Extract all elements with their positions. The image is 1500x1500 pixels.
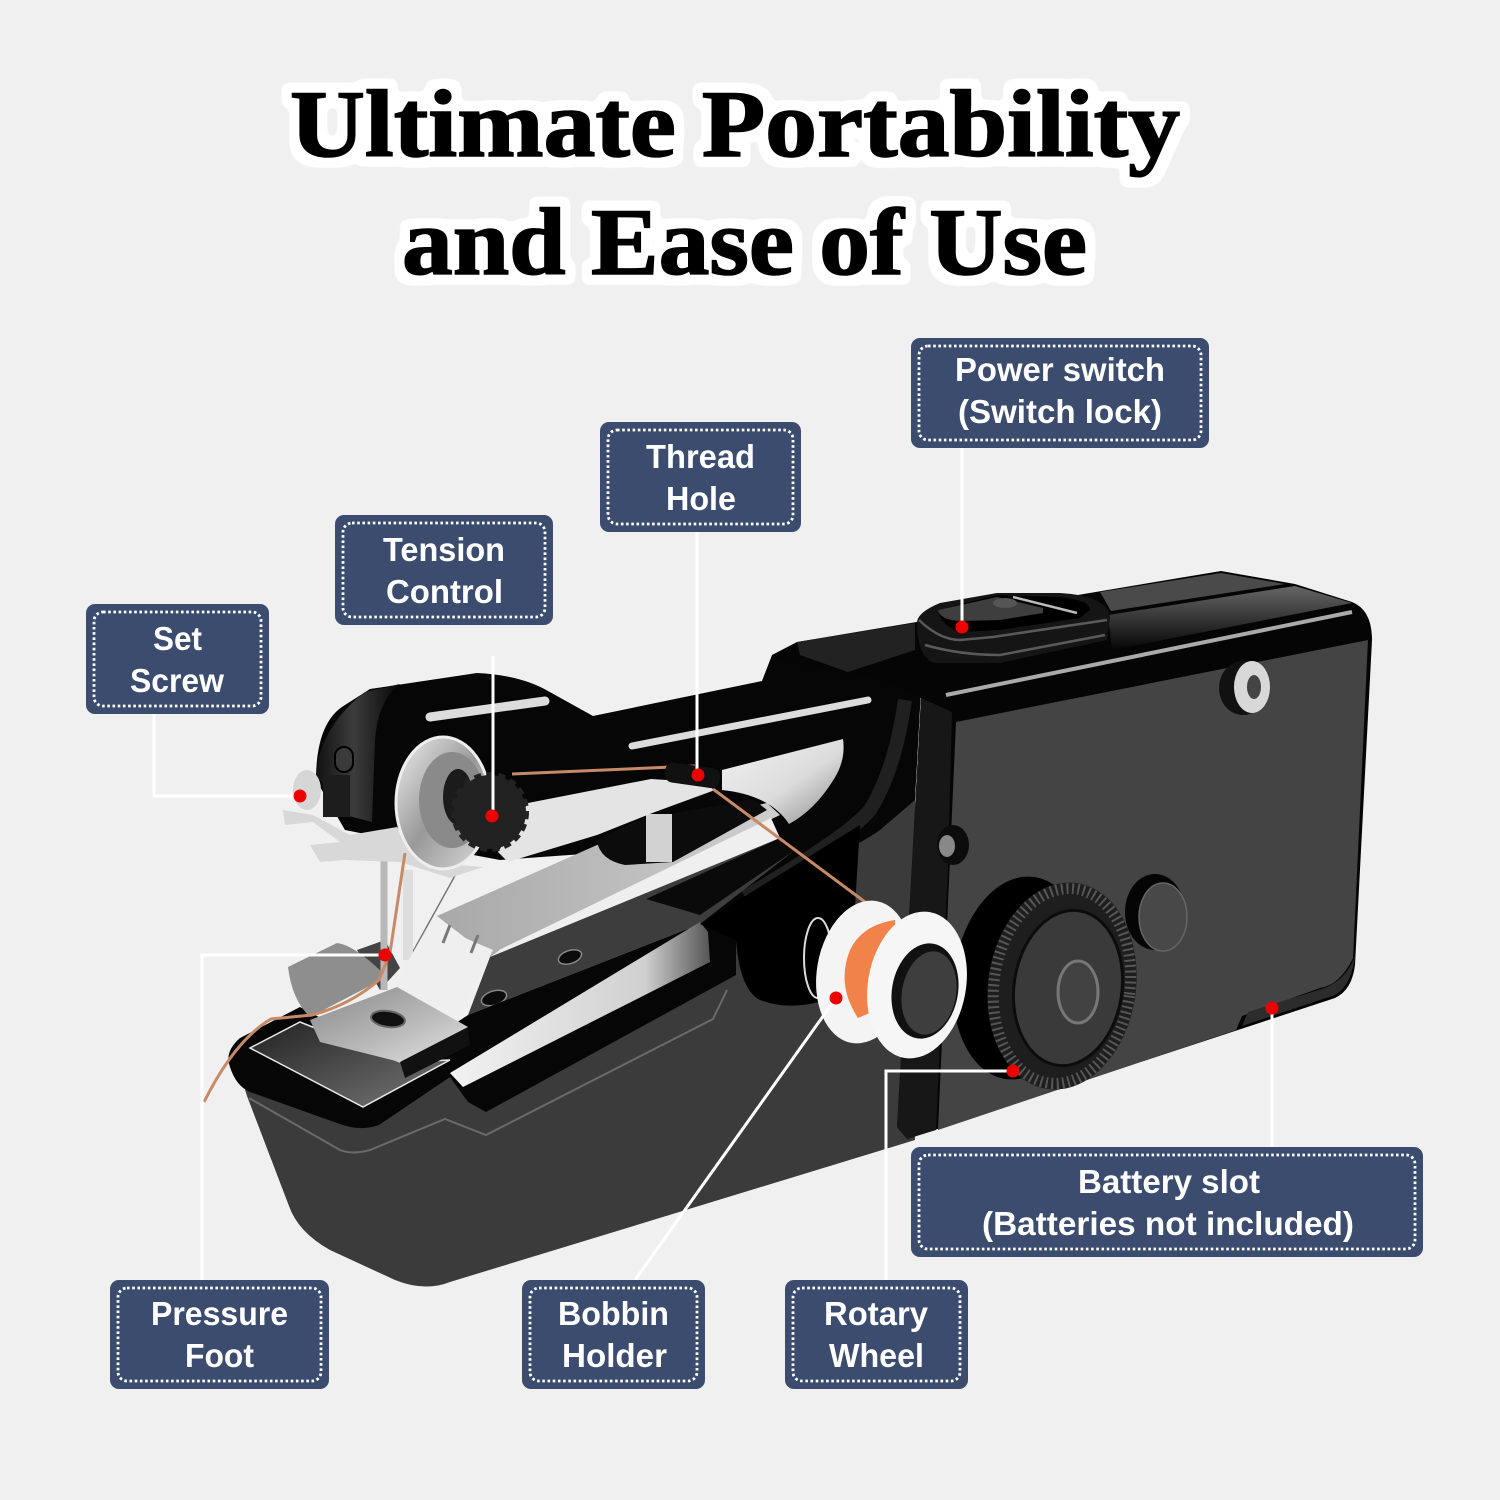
head slot: [335, 747, 353, 772]
lid highlight: [946, 612, 1352, 695]
label: battery slot: (Batteries not included): [982, 1205, 1354, 1242]
machine arm: [316, 642, 921, 924]
body contour line: [249, 990, 727, 1152]
bright rail: [499, 818, 780, 962]
marker: rotary wheel: [1006, 1064, 1020, 1078]
marker: thread hole: [692, 768, 704, 782]
title: [290, 71, 1180, 295]
mount rivets: [479, 947, 583, 1009]
bobbin: [804, 893, 978, 1066]
presser foot slot: [370, 1009, 406, 1029]
leader line: rotary wheel: [886, 1071, 1013, 1280]
label: pressure foot: Pressure: [151, 1295, 288, 1332]
mount plate dark fold: [646, 838, 795, 915]
adjust knob: [1125, 874, 1187, 951]
shoulder curve: [745, 700, 905, 897]
left lid panel: [797, 623, 915, 672]
switch recess: [938, 595, 1090, 632]
presser foot plate: [310, 987, 468, 1062]
bracket screws: [443, 925, 478, 953]
thread: [204, 766, 892, 1102]
leader line: pressure foot: [202, 955, 385, 1280]
dark block behind foot: [357, 940, 400, 990]
rotary wheel: [940, 868, 1150, 1099]
marker: power switch: [956, 620, 968, 634]
white bracket: [393, 923, 493, 1015]
label: battery slot: Battery slot: [1078, 1163, 1260, 1200]
upper silver lever: [498, 779, 715, 862]
label: pressure foot: Foot: [185, 1337, 254, 1374]
label: power switch: (Switch lock): [958, 393, 1162, 430]
black recess: [700, 825, 860, 1006]
title: and Ease of Use: [402, 189, 1087, 295]
perforated mount plate: [468, 838, 795, 1015]
leader line: tension control: [492, 656, 494, 815]
tension disc: [396, 737, 490, 869]
product illustration: handheld sewing machine: [204, 571, 1372, 1287]
power switch: [917, 593, 1110, 663]
head side shading: [316, 684, 400, 822]
marker: set screw: [294, 790, 306, 802]
needle guide: [403, 870, 413, 960]
thread hole guide: [664, 762, 721, 789]
label: power switch: Power switch: [955, 351, 1165, 388]
machine lower body: [236, 790, 915, 1287]
battery box: [772, 571, 1372, 1139]
top right screw: [1219, 661, 1270, 715]
leader line: battery slot: [1270, 1008, 1274, 1147]
label: power switch: [911, 338, 1209, 448]
label: pressure foot: [110, 1280, 329, 1389]
silver needle plate: [437, 803, 780, 957]
leader line: power switch: [960, 448, 964, 627]
title: Ultimate Portability: [290, 71, 1180, 177]
label: rotary wheel: Rotary: [824, 1295, 929, 1332]
lever slot: [597, 799, 767, 865]
label: rotary wheel: Wheel: [829, 1337, 924, 1374]
base plate: [250, 1022, 450, 1107]
switch sliver: [1013, 597, 1077, 613]
label: thread hole: Hole: [666, 480, 736, 517]
set screw: [293, 770, 350, 817]
label: bobbin holder: Holder: [562, 1337, 667, 1374]
wire behind needle: [410, 872, 457, 957]
label: set screw: Set: [153, 620, 202, 657]
label: tension control: Tension: [383, 531, 505, 568]
switch base: [917, 593, 1110, 663]
label: thread hole: [600, 422, 801, 532]
front face: [938, 640, 1368, 1130]
tension spring: [443, 769, 473, 825]
label: tension control: Control: [386, 573, 503, 610]
label: set screw: Screw: [130, 662, 224, 699]
presser foot toe: [288, 943, 387, 1017]
lower silver rail: [450, 922, 710, 1087]
label: set screw: [86, 604, 269, 714]
label: thread hole: Thread: [646, 438, 755, 475]
tension disc inner: [419, 752, 485, 848]
marker: tension control: [486, 810, 498, 822]
side screw: [937, 825, 969, 865]
lid top panel: [1100, 573, 1285, 611]
crescent silver plate: [722, 739, 844, 824]
presser foot shadow: [400, 1027, 470, 1078]
chassis lip: [228, 924, 736, 1128]
label: battery slot: [911, 1147, 1423, 1257]
battery slot: [1242, 955, 1355, 1026]
leader line: set screw: [154, 714, 300, 796]
switch rim: [919, 620, 1107, 655]
leader line: bobbin holder: [635, 998, 836, 1280]
label: bobbin holder: [522, 1280, 705, 1389]
leader line: thread hole: [696, 532, 698, 775]
arm highlight strips: [430, 700, 868, 746]
marker: battery slot: [1266, 1002, 1278, 1014]
left edge of box: [897, 698, 952, 1139]
central post: [646, 814, 672, 862]
switch button: [938, 597, 1043, 621]
lid second panel: [1108, 586, 1352, 650]
label: tension control: [335, 515, 553, 625]
switch nub: [993, 598, 1017, 608]
tension knob: [454, 775, 526, 849]
needle: [380, 855, 388, 990]
silver presser bar: [283, 810, 483, 878]
marker: pressure foot: [378, 948, 392, 962]
label: bobbin holder: Bobbin: [558, 1295, 669, 1332]
label: rotary wheel: [785, 1280, 968, 1389]
marker: bobbin holder: [830, 992, 842, 1004]
